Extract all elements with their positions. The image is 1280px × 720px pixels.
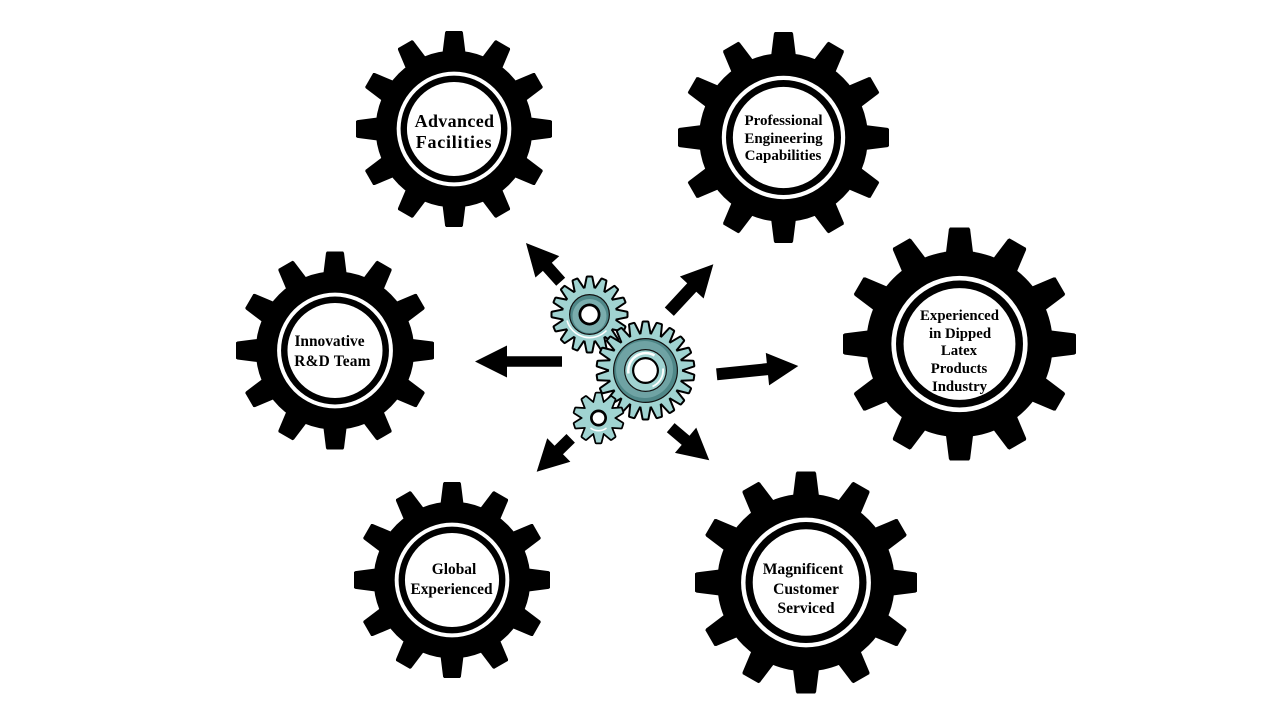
label: Experienced in Dipped Latex Products Industry: Latex [941, 343, 978, 359]
arrow: to Innovative R&D Team [475, 346, 562, 378]
icon: upper small teal gear [552, 278, 626, 352]
gear: Global Experienced [354, 482, 550, 678]
arrow: to Advanced Facilities [514, 232, 573, 292]
icon: large teal gear [597, 322, 694, 418]
label: Global Experienced: Experienced [410, 581, 493, 598]
label: Magnificent Customer Serviced: Magnificent [763, 561, 844, 578]
label: Advanced Facilities: Advanced [415, 111, 494, 131]
label: Experienced in Dipped Latex Products Industry: in Dipped [929, 326, 992, 342]
gear: Experienced in Dipped Latex Products Industry [843, 228, 1076, 460]
label: Advanced Facilities: Facilities [416, 132, 492, 152]
label: Magnificent Customer Serviced: Customer [773, 581, 839, 598]
central gear cluster icon [552, 278, 694, 442]
label: Professional Engineering Capabilities: Engineering [744, 131, 823, 147]
label: Professional Engineering Capabilities: Capabilities [745, 148, 821, 164]
arrow: to Magnificent Customer Serviced [660, 415, 720, 473]
arrow: to Professional Engineering Capabilities [657, 253, 725, 323]
gear: Advanced Facilities [356, 31, 552, 227]
label: Experienced in Dipped Latex Products Industry: Products [931, 361, 987, 377]
label: Global Experienced: Global [432, 561, 477, 578]
label: Innovative R&D Team: Innovative [294, 333, 365, 350]
arrow: to Global Experienced [525, 427, 582, 484]
label: Magnificent Customer Serviced: Serviced [777, 600, 835, 617]
label: Innovative R&D Team: R&D Team [294, 353, 371, 370]
gear: Magnificent Customer Serviced [695, 472, 917, 694]
label: Experienced in Dipped Latex Products Industry: Industry [932, 379, 988, 395]
arrow: to Experienced in Dipped Latex Products Industry [715, 350, 800, 391]
gear: Professional Engineering Capabilities [678, 32, 889, 243]
label: Professional Engineering Capabilities: Professional [744, 113, 823, 129]
gear: Innovative R&D Team [236, 252, 434, 450]
icon: lower small teal gear [574, 394, 623, 442]
label: Experienced in Dipped Latex Products Industry: Experienced [920, 308, 1000, 324]
